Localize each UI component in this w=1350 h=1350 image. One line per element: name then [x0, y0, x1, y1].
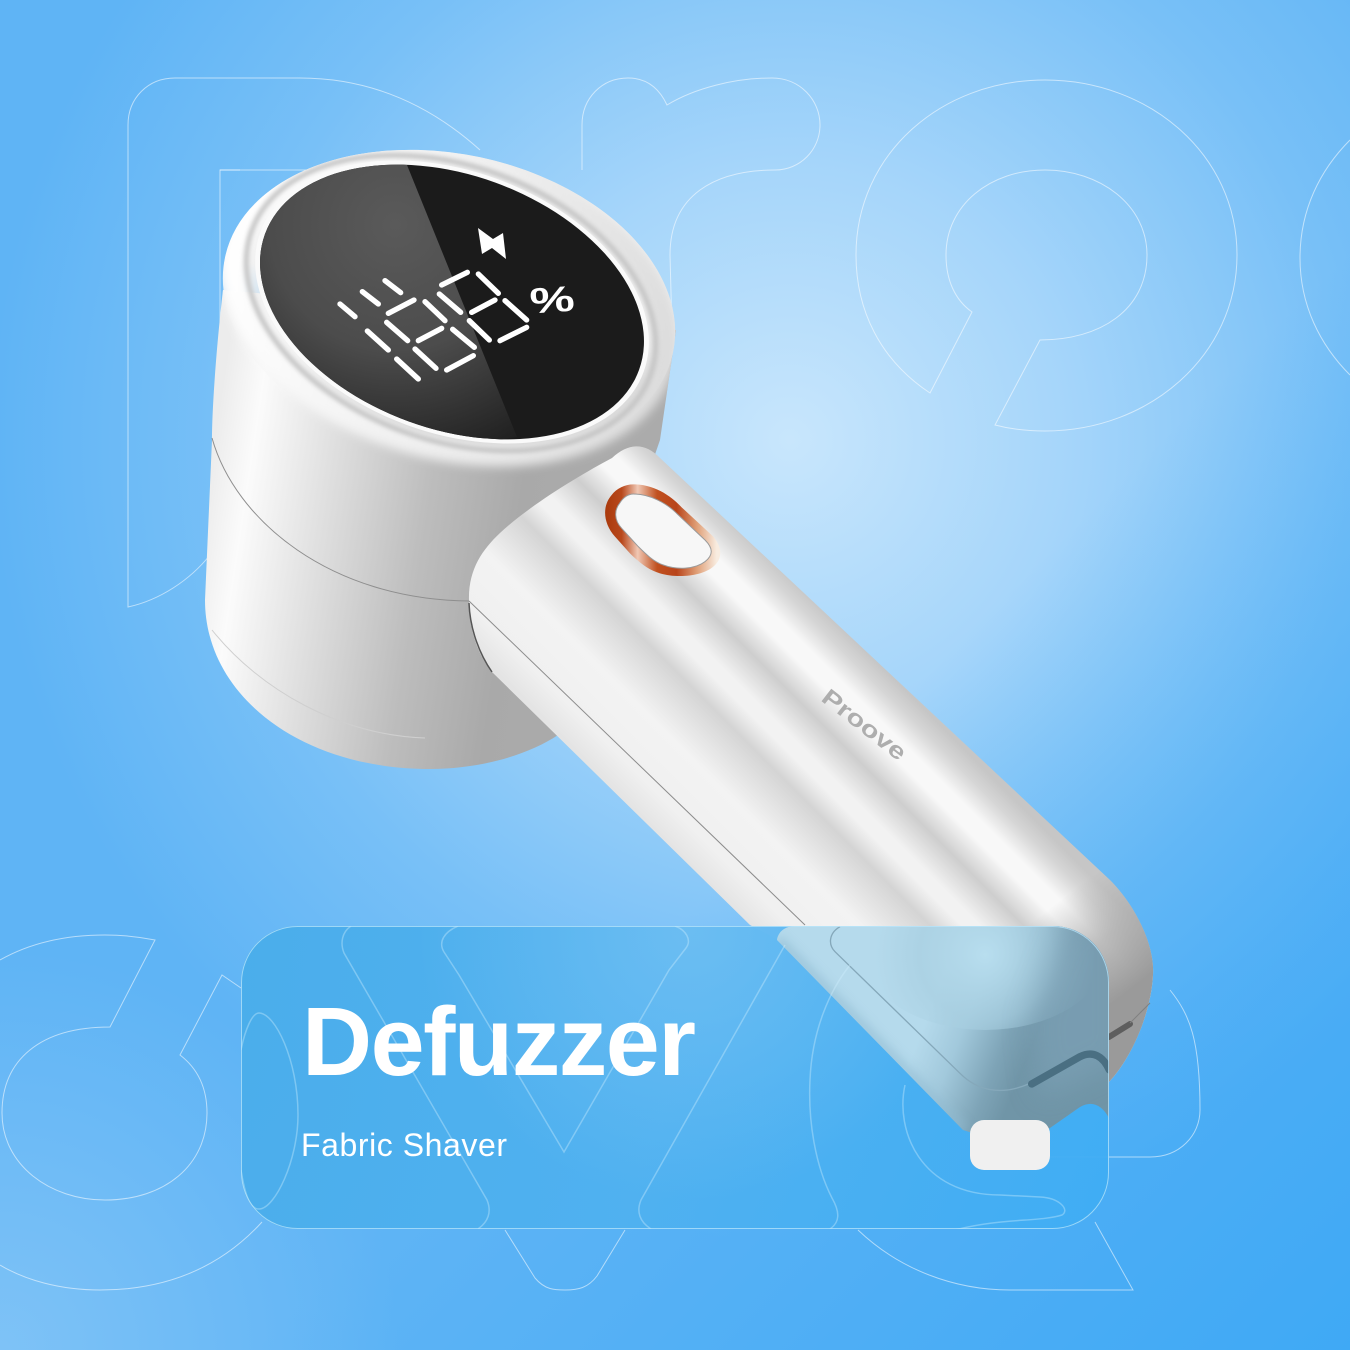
handle — [469, 446, 1153, 1082]
handle end shading — [660, 458, 1153, 1082]
icon: charging bolt — [478, 228, 506, 259]
title: Defuzzer — [302, 987, 696, 1096]
battery percentage digits — [340, 272, 527, 379]
display — [260, 164, 644, 440]
cylinder seams — [212, 438, 470, 738]
seam through glass — [830, 927, 1109, 1090]
subtitle: Fabric Shaver — [301, 1127, 507, 1163]
cylinder head body — [205, 290, 676, 769]
handle seen through glass — [777, 926, 1109, 1132]
glass outline lettering — [241, 926, 1065, 1230]
groove at handle end — [1109, 1003, 1150, 1037]
brand name on handle: Proove — [817, 683, 912, 766]
top rim — [222, 150, 676, 472]
glass title card — [241, 926, 1109, 1229]
percent sign: % — [528, 278, 576, 322]
power button — [605, 484, 720, 576]
white label chip — [970, 1120, 1050, 1170]
device: fabric shaver — [194, 102, 1153, 1082]
handle seam — [469, 601, 805, 925]
